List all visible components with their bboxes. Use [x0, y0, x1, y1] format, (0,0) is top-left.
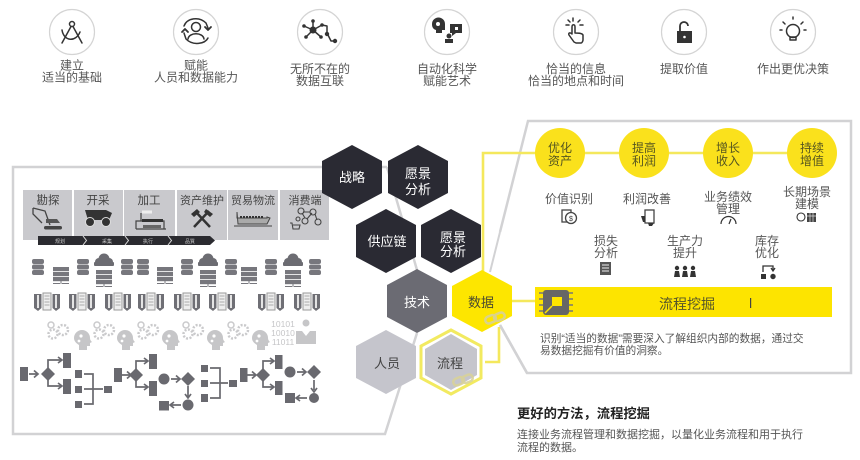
- lever: loss analysis: 分析: [594, 246, 618, 260]
- value drivers: [535, 128, 837, 178]
- lever: value identification: $: [569, 216, 573, 223]
- hex: data: [452, 270, 512, 332]
- chevron process bar: 采集: [102, 238, 112, 245]
- method description: 流程的数据。: [517, 440, 583, 454]
- lever: business performance: 管理: [716, 201, 740, 216]
- driver: raise profit: 利润: [632, 154, 656, 168]
- process mining bar: 流程挖掘: [659, 296, 715, 312]
- benefit: empowering people: [154, 10, 238, 84]
- hexagon cluster: [322, 145, 512, 394]
- hex: technology: [387, 269, 447, 333]
- value chain stages: [23, 190, 329, 240]
- stage: mining: 开采: [86, 194, 110, 207]
- panel: right data frame: [500, 121, 851, 373]
- stage: exploration: [23, 190, 72, 240]
- hex: people: [356, 330, 416, 394]
- chevron process bar: [38, 236, 215, 245]
- hex: strategy: [322, 145, 382, 209]
- driver: sustain value: [787, 128, 837, 178]
- flow group 1: [20, 353, 112, 408]
- driver: grow revenue: 收入: [716, 154, 740, 168]
- icon: chip: [539, 290, 573, 315]
- analytics gears and heads row: 11011: [272, 337, 294, 347]
- data infrastructure row: [32, 254, 321, 287]
- flow group 2: [114, 354, 195, 410]
- hex: supply chain: [356, 209, 416, 273]
- heading: better method: 更好的方法，流程挖掘: [517, 405, 650, 421]
- benefit: connected data: [290, 10, 350, 88]
- stage: consumer end: 消费端: [288, 193, 322, 207]
- lever: business performance: [704, 189, 752, 224]
- hex: vision analysis 2: 分析: [440, 244, 466, 259]
- panel: left analytics frame: [13, 167, 417, 434]
- benefit: extract value: 提取价值: [660, 61, 708, 76]
- benefit: connected data: 无所不在的: [290, 61, 350, 76]
- benefit: better decisions: [757, 10, 829, 76]
- stage: processing: 加工: [138, 194, 160, 207]
- hex: vision analysis 1: 分析: [405, 182, 431, 197]
- chevron process bar: 执行: [143, 238, 153, 245]
- hex: data: 数据: [468, 295, 494, 310]
- stage: logistics: 贸易物流: [231, 193, 275, 207]
- hex: vision analysis 2: 愿景: [440, 230, 466, 245]
- stage: exploration: 勘探: [36, 193, 60, 207]
- flow group 3: [201, 365, 237, 402]
- lever: long-term scenario modeling: [783, 185, 831, 222]
- stage: asset maintenance: 资产维护: [180, 193, 224, 207]
- benefit: foundation: [42, 10, 102, 84]
- hex: vision analysis 1: [388, 145, 448, 209]
- lever: inventory optimization: 库存: [755, 233, 779, 248]
- driver: grow revenue: 增长: [716, 141, 740, 155]
- hex: supply chain: 供应链: [367, 234, 407, 249]
- stage: mining: [74, 190, 123, 240]
- driver: raise profit: 提高: [632, 140, 656, 155]
- hex: technology: 技术: [404, 295, 430, 310]
- lever: inventory optimization: 优化: [755, 246, 779, 260]
- hex: vision analysis 2: [421, 209, 481, 273]
- benefit: connected data: 数据互联: [296, 73, 344, 88]
- connector: grey link to lower frame: [500, 325, 527, 373]
- icon row and benefits: [42, 10, 829, 88]
- hex: strategy: 战略: [339, 170, 365, 185]
- driver: optimize assets: [535, 128, 585, 178]
- lever: productivity uplift: [667, 234, 703, 277]
- lever: loss analysis: [594, 233, 618, 275]
- lever: long-term scenario modeling: 长期场景: [783, 185, 831, 199]
- lever: long-term scenario modeling: 建模: [795, 197, 819, 211]
- data description: 易数据挖掘有价值的洞察。: [540, 344, 668, 357]
- chevron process bar: 规划: [55, 238, 65, 245]
- process flow diagrams: [20, 353, 321, 410]
- hex: vision analysis 1: 愿景: [405, 166, 431, 181]
- analytics gears and heads row: 10101: [271, 319, 295, 329]
- driver: sustain value: 增值: [800, 153, 824, 168]
- benefit: right information: 恰当的信息: [546, 61, 606, 76]
- lever: productivity uplift: 提升: [673, 245, 697, 260]
- value levers: [545, 185, 831, 279]
- benefit: right information: 恰当的地点和时间: [528, 73, 624, 88]
- process mining bar: [535, 287, 832, 317]
- benefit: automation and art: 赋能艺术: [423, 74, 471, 88]
- data description: [540, 332, 804, 357]
- lever: business performance: 业务绩效: [704, 189, 752, 204]
- benefit: extract value: [660, 10, 708, 76]
- stage: consumer end: [280, 190, 329, 240]
- hex: people: 人员: [374, 356, 400, 371]
- hex: process: [421, 330, 481, 394]
- benefit: automation and art: 自动化科学: [417, 61, 477, 76]
- data description: 识别“适当的数据”需要深入了解组织内部的数据，通过交: [540, 332, 804, 345]
- driver: optimize assets: 优化: [548, 141, 572, 155]
- connector: diagonal frame link: [490, 232, 500, 272]
- benefit: foundation: 建立: [60, 58, 84, 72]
- benefit: empowering people: 赋能: [184, 58, 208, 72]
- lever: inventory optimization: [755, 233, 779, 279]
- analytics gears and heads row: 10010: [271, 328, 295, 338]
- lever: loss analysis: 损失: [594, 233, 618, 248]
- driver: grow revenue: [703, 128, 753, 178]
- driver: optimize assets: 资产: [548, 154, 572, 168]
- lever: value identification: [545, 191, 593, 224]
- method description: [517, 427, 803, 454]
- benefit: right information: [528, 10, 624, 88]
- flow group 4: [240, 355, 321, 403]
- stage: logistics: [228, 190, 278, 240]
- lever: value identification: 价值识别: [545, 191, 593, 206]
- yellow connector lines: [483, 153, 812, 362]
- method description: 连接业务流程管理和数据挖掘，以量化业务流程和用于执行: [517, 427, 803, 441]
- driver: raise profit: [619, 128, 669, 178]
- stage: asset maintenance: [177, 190, 227, 240]
- hex: process: 流程: [437, 356, 463, 371]
- lever: profit improvement: 利润改善: [623, 191, 671, 206]
- benefit: empowering people: 人员和数据能力: [154, 70, 238, 84]
- benefit: better decisions: 作出更优决策: [757, 62, 829, 76]
- server rack row: [34, 293, 320, 311]
- benefit: automation and art: [417, 10, 477, 88]
- analytics gears and heads row: [48, 319, 316, 350]
- lever: productivity uplift: 生产力: [667, 234, 703, 248]
- benefit: foundation: 适当的基础: [42, 70, 102, 84]
- chevron process bar: 品質: [185, 238, 195, 245]
- stage: processing: [124, 190, 175, 240]
- lever: profit improvement: [623, 191, 671, 226]
- driver: sustain value: 持续: [800, 140, 824, 155]
